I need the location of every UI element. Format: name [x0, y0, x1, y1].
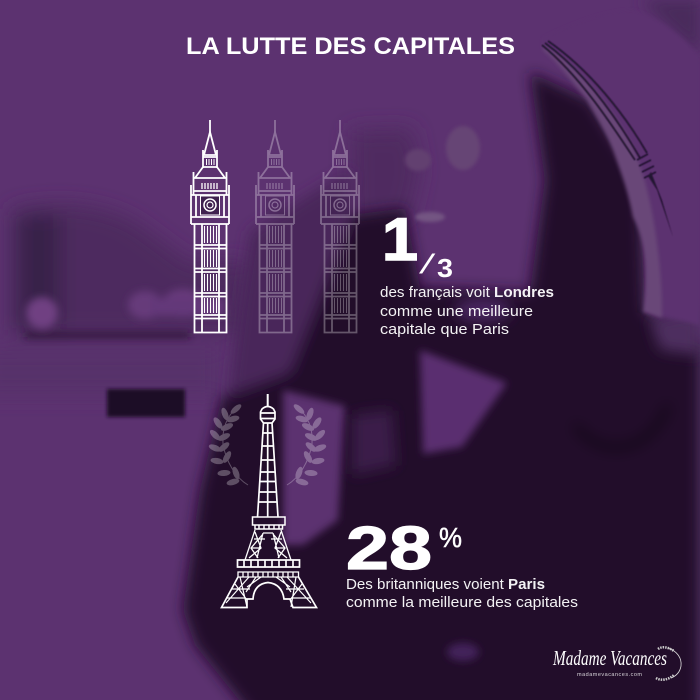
icon: Big Ben faded 3	[321, 120, 359, 332]
stat: one third: 1	[382, 206, 418, 273]
text: Londres statement: capitale que Paris	[380, 322, 509, 338]
text: Londres statement: comme une meilleure	[380, 304, 533, 320]
text: Paris statement	[346, 577, 578, 611]
icon: right laurel branch	[287, 403, 327, 487]
icon: Big Ben highlighted	[191, 120, 229, 332]
stat: one third: 3	[437, 253, 453, 283]
stat: one third	[382, 206, 453, 283]
stat: 28 percent: 28	[346, 514, 432, 582]
text: Paris statement: Des britanniques voient Paris	[346, 577, 545, 593]
logo: Madame Vacances: madamevacances.com	[577, 672, 642, 678]
stat: 28 percent: %	[439, 522, 462, 553]
text: Paris statement: comme la meilleure des capitales	[346, 595, 578, 611]
icon: left laurel branch	[208, 403, 248, 487]
stat: 28 percent	[346, 514, 462, 582]
text: Londres statement: des français voit Londres	[380, 285, 554, 301]
logo: Madame Vacances	[552, 646, 681, 680]
text: Londres statement	[380, 285, 554, 338]
icon: Eiffel Tower	[222, 394, 316, 608]
icon: Big Ben faded 2	[256, 120, 294, 332]
stat: one third: /	[416, 249, 438, 280]
title: LA LUTTE DES CAPITALES	[186, 33, 515, 60]
